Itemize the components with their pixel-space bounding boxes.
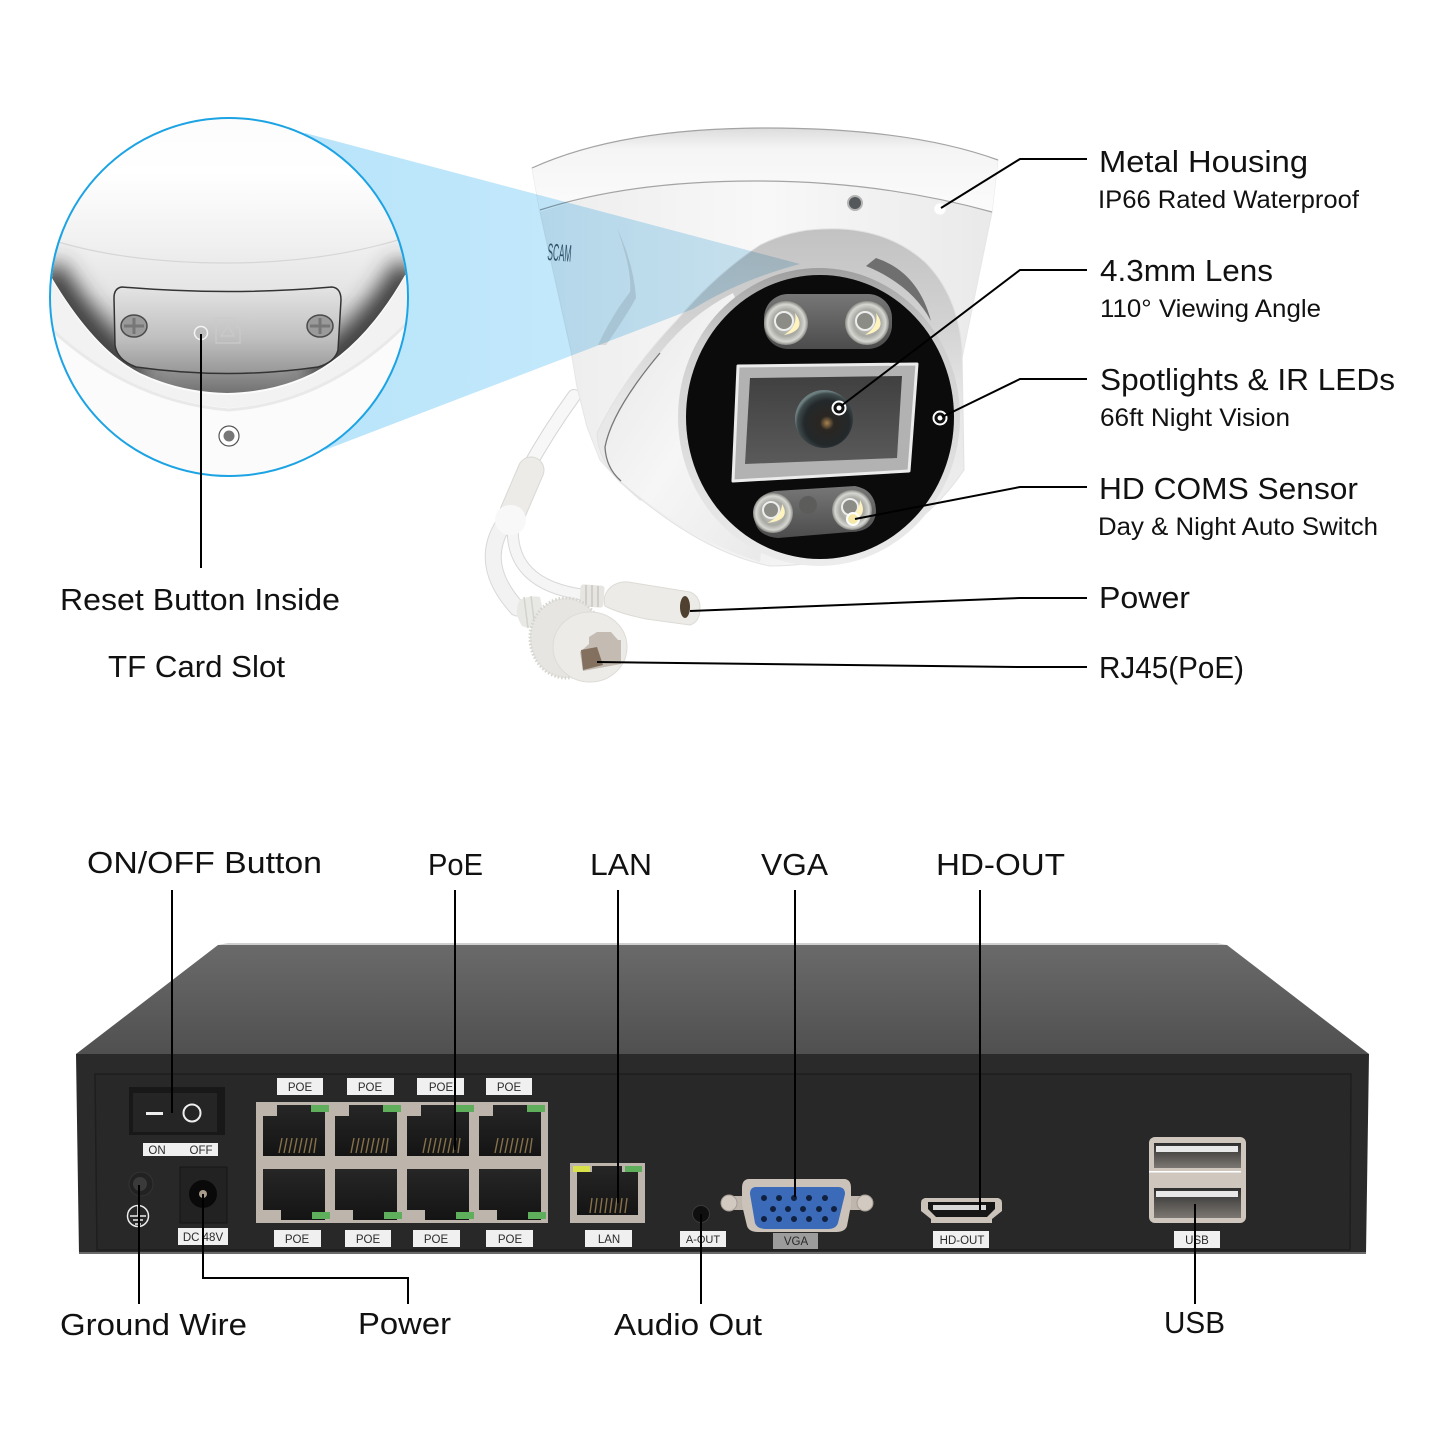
nvr inner panel bbox=[95, 1074, 1351, 1250]
ir led 1 bbox=[753, 493, 793, 533]
bottom led bar bbox=[754, 486, 876, 538]
callout: lens: 110° Viewing Angle bbox=[1100, 295, 1321, 323]
blue zoom wedge bbox=[305, 133, 800, 450]
nvr recorder bbox=[76, 943, 1369, 1254]
callout: reset button: Reset Button Inside bbox=[60, 582, 340, 617]
on off tag: ON bbox=[148, 1145, 166, 1157]
dc label bbox=[178, 1228, 228, 1245]
right screw bbox=[307, 315, 333, 337]
callout: rj45 bbox=[597, 650, 1244, 685]
callout: camera power: Power bbox=[1099, 580, 1190, 615]
callout: hd-out: HD-OUT bbox=[936, 847, 1065, 882]
ground symbol bbox=[128, 1206, 148, 1226]
callout: metal housing: Metal Housing bbox=[1099, 144, 1308, 179]
nvr top edge highlight bbox=[218, 943, 1227, 945]
hdmi port bbox=[921, 1198, 1002, 1223]
ir led 2 bbox=[832, 490, 872, 530]
hdmi label: HD-OUT bbox=[940, 1235, 984, 1247]
audio label bbox=[680, 1231, 726, 1247]
vga port bbox=[721, 1179, 873, 1232]
circle outline bbox=[50, 118, 408, 476]
power connector bbox=[579, 582, 700, 625]
spotlight led 1 bbox=[764, 301, 808, 345]
camera cables bbox=[493, 396, 585, 608]
body groove bbox=[598, 228, 636, 345]
circle base bbox=[50, 118, 408, 476]
nvr base edge bbox=[79, 1252, 1366, 1254]
lan port bbox=[570, 1163, 645, 1223]
hdmi label bbox=[933, 1231, 989, 1248]
usb label: USB bbox=[1185, 1235, 1209, 1247]
ground screw bbox=[129, 1172, 153, 1196]
usb label bbox=[1174, 1231, 1220, 1248]
lan label bbox=[585, 1230, 632, 1247]
callout: usb: USB bbox=[1164, 1305, 1225, 1340]
callout: lens bbox=[832, 253, 1321, 414]
on off tag: OFF bbox=[190, 1145, 212, 1157]
upper dome bbox=[60, 231, 397, 240]
poe bottom labels: POE bbox=[498, 1234, 522, 1246]
audio jack bbox=[692, 1206, 710, 1222]
label: tf card slot: TF Card Slot bbox=[108, 649, 285, 684]
lens bbox=[795, 390, 853, 448]
security camera bbox=[493, 128, 998, 682]
callout: lens: 4.3mm Lens bbox=[1100, 253, 1273, 288]
usb ports bbox=[1149, 1137, 1246, 1223]
dc jack bbox=[180, 1167, 227, 1223]
spotlight led 2 bbox=[845, 301, 889, 345]
callout: vga: VGA bbox=[761, 847, 828, 882]
on off tag bbox=[143, 1143, 218, 1157]
callout: spotlights: Spotlights & IR LEDs bbox=[1100, 362, 1395, 397]
vga label: VGA bbox=[784, 1236, 808, 1248]
poe ports block bbox=[256, 1102, 548, 1223]
callout: sensor: Day & Night Auto Switch bbox=[1098, 513, 1378, 541]
callout: camera power bbox=[690, 580, 1190, 615]
lan label: LAN bbox=[598, 1234, 620, 1246]
nvr front face bbox=[76, 1054, 1369, 1254]
poe top labels: POE bbox=[429, 1082, 453, 1094]
callout: poe: PoE bbox=[428, 847, 483, 882]
callout: spotlights bbox=[934, 362, 1395, 432]
callout: ground wire: Ground Wire bbox=[60, 1307, 247, 1342]
callout: usb bbox=[1164, 1204, 1225, 1340]
security camera: SCAM bbox=[547, 239, 572, 268]
bowl shading bbox=[40, 240, 420, 410]
poe top labels: POE bbox=[358, 1082, 382, 1094]
poe bottom labels: POE bbox=[356, 1234, 380, 1246]
callout: audio out: Audio Out bbox=[614, 1307, 762, 1342]
left screw bbox=[121, 315, 147, 337]
poe top labels: POE bbox=[288, 1082, 312, 1094]
dc label: DC 48V bbox=[183, 1232, 223, 1244]
audio label: A-OUT bbox=[686, 1234, 720, 1246]
callout: metal housing bbox=[941, 144, 1359, 214]
dome edge lines bbox=[532, 128, 998, 212]
top led bar bbox=[764, 294, 892, 349]
upper seam bbox=[58, 240, 398, 263]
poe bottom labels bbox=[274, 1230, 533, 1247]
collar edge lines bbox=[605, 353, 660, 481]
light sensor bbox=[799, 496, 817, 514]
eyeball socket rim bbox=[597, 229, 964, 566]
callout: nvr power: Power bbox=[358, 1306, 451, 1341]
power switch bbox=[129, 1087, 225, 1135]
housing point marker bbox=[934, 203, 946, 215]
white collar bbox=[605, 293, 780, 562]
poe bottom labels: POE bbox=[285, 1234, 309, 1246]
lens window bbox=[745, 376, 902, 464]
lens frame bbox=[733, 364, 917, 481]
vga label bbox=[773, 1233, 818, 1249]
rj45 connector bbox=[517, 596, 627, 682]
callout: rj45: RJ45(PoE) bbox=[1099, 650, 1244, 685]
microphone hole bbox=[848, 196, 862, 210]
callout: sensor bbox=[847, 471, 1378, 541]
poe top labels: POE bbox=[497, 1082, 521, 1094]
socket shadow bbox=[866, 258, 931, 321]
callout: spotlights: 66ft Night Vision bbox=[1100, 404, 1290, 432]
callout: sensor: HD COMS Sensor bbox=[1099, 471, 1358, 506]
poe bottom labels: POE bbox=[424, 1234, 448, 1246]
reset marker bbox=[194, 326, 208, 340]
callout: nvr power bbox=[203, 1194, 451, 1341]
callout: lan: LAN bbox=[590, 847, 652, 882]
tf card slot icon bbox=[216, 318, 240, 343]
face ring bbox=[678, 268, 960, 566]
poe top labels bbox=[277, 1078, 532, 1095]
slot cover plate bbox=[114, 287, 341, 374]
dome housing bbox=[532, 128, 998, 500]
zoom detail circle bbox=[40, 110, 420, 476]
dome cap bbox=[532, 128, 998, 212]
black face bbox=[686, 275, 954, 559]
lower button bbox=[219, 426, 239, 446]
callout: on off button: ON/OFF Button bbox=[87, 845, 322, 880]
nvr top face bbox=[76, 945, 1369, 1054]
callout: metal housing: IP66 Rated Waterproof bbox=[1098, 186, 1359, 214]
